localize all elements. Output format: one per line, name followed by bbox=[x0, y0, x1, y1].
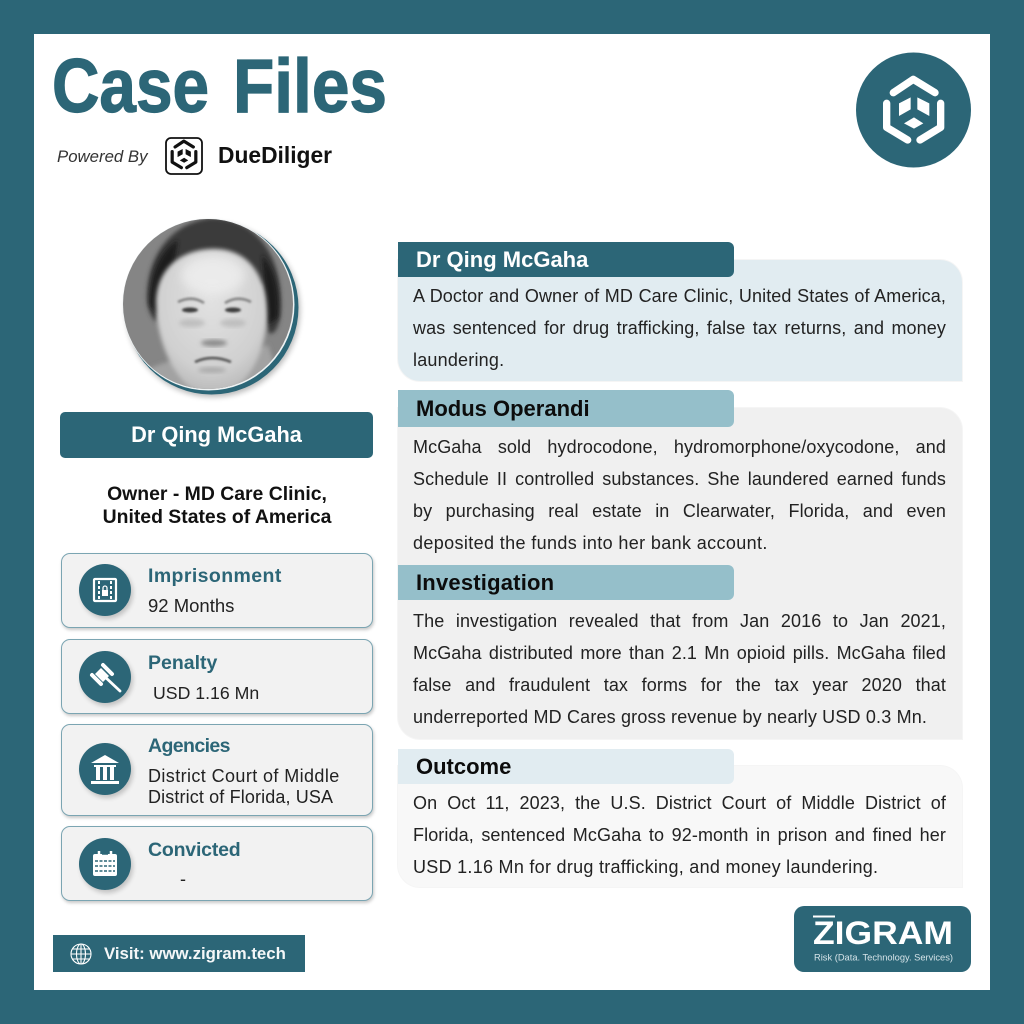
icon: large DueDiliger logo bbox=[856, 52, 971, 168]
convicted title: Convicted bbox=[148, 839, 240, 861]
penalty title: Penalty bbox=[148, 652, 217, 674]
outcome line 1: On Oct 11, 2023, the U.S. District Court of Middle District of bbox=[413, 793, 946, 813]
card: convicted bbox=[61, 826, 373, 901]
heading: Modus Operandi bbox=[398, 390, 734, 427]
name banner: Dr Qing McGaha bbox=[131, 422, 302, 447]
shoulders bbox=[151, 345, 274, 389]
modus operandi line 4: deposited the funds into her bank account. bbox=[413, 533, 768, 553]
icon: courthouse bbox=[79, 743, 131, 795]
investigation line 3: false and fraudulent tax forms for the tax year 2020 that bbox=[413, 675, 946, 695]
portrait photo bbox=[122, 218, 303, 400]
agencies value: District Court of Middle bbox=[148, 766, 340, 786]
brand name: DueDiliger bbox=[218, 142, 332, 168]
agencies title: Agencies bbox=[148, 735, 230, 757]
outcome line 3: USD 1.16 Mn for drug trafficking, and money laundering. bbox=[413, 857, 878, 877]
heading: Dr Qing McGaha: Dr Qing McGaha bbox=[416, 247, 588, 272]
role and location: United States of America bbox=[103, 506, 331, 528]
website bar bbox=[53, 935, 305, 972]
icon: globe bbox=[70, 944, 92, 964]
agencies value: District of Florida, USA bbox=[148, 786, 333, 806]
convicted value: - bbox=[180, 869, 186, 889]
profile text line 1: A Doctor and Owner of MD Care Clinic, United States of America, bbox=[413, 286, 946, 306]
panel: profile summary bbox=[398, 260, 962, 381]
heading: Outcome bbox=[398, 749, 734, 784]
icon: DueDiliger logo bbox=[165, 137, 203, 175]
card: penalty bbox=[61, 639, 373, 714]
title bbox=[52, 44, 387, 125]
logo tagline: Risk (Data. Technology. Services) bbox=[814, 952, 953, 964]
profile text line 2: was sentenced for drug trafficking, false tax returns, and money bbox=[413, 318, 946, 338]
ZIGRAM logo bbox=[794, 906, 971, 972]
mouth bbox=[195, 358, 231, 362]
hair bbox=[147, 218, 281, 333]
heading: Investigation: Investigation bbox=[416, 570, 554, 595]
heading: Investigation bbox=[398, 565, 734, 600]
heading: Dr Qing McGaha bbox=[398, 242, 734, 277]
brows & eyes bbox=[178, 299, 251, 303]
icon: calendar bbox=[79, 838, 131, 890]
nose bbox=[210, 308, 218, 334]
imprisonment title: Imprisonment bbox=[148, 565, 282, 587]
icon: locked cell bbox=[79, 564, 131, 616]
investigation line 1: The investigation revealed that from Jan 2016 to Jan 2021, bbox=[413, 611, 946, 631]
powered by text: Powered By bbox=[57, 147, 147, 166]
card: imprisonment bbox=[61, 553, 373, 628]
powered by line bbox=[57, 137, 332, 175]
modus operandi line 1: McGaha sold hydrocodone, hydromorphone/oxycodone, and bbox=[413, 437, 946, 457]
outcome line 2: Florida, sentenced McGaha to 92-month in prison and fined her bbox=[413, 825, 946, 845]
icon: gavel bbox=[79, 651, 131, 703]
name banner bbox=[60, 412, 373, 458]
logo wordmark: ZIGRAM bbox=[813, 915, 953, 950]
website text: Visit: www.zigram.tech bbox=[104, 944, 286, 963]
investigation line 2: McGaha distributed more than 2.1 Mn opioid pills. McGaha filed bbox=[413, 643, 946, 663]
modus operandi line 3: by purchasing real estate in Clearwater, Florida, and even bbox=[413, 501, 946, 521]
panel: outcome bbox=[398, 766, 962, 887]
role and location bbox=[103, 483, 332, 528]
imprisonment value: 92 Months bbox=[148, 595, 234, 616]
penalty value: USD 1.16 Mn bbox=[153, 682, 259, 702]
investigation line 4: underreported MD Cares gross revenue by nearly USD 0.3 Mn. bbox=[413, 707, 927, 727]
heading: Outcome: Outcome bbox=[416, 754, 511, 779]
role and location: Owner - MD Care Clinic, bbox=[107, 483, 327, 505]
panel: modus operandi and investigation bbox=[398, 408, 962, 739]
card: agencies bbox=[61, 724, 373, 816]
profile text line 3: laundering. bbox=[413, 350, 504, 370]
heading: Modus Operandi: Modus Operandi bbox=[416, 396, 590, 421]
modus operandi line 2: Schedule II controlled substances. She laundered earned funds bbox=[413, 469, 946, 489]
agencies value bbox=[148, 766, 340, 806]
face bbox=[156, 249, 267, 393]
